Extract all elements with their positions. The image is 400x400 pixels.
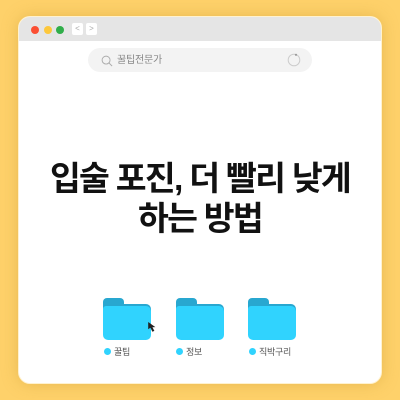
folder body: [176, 306, 224, 340]
icon: reload: [288, 54, 300, 66]
label text: 직박구리: [259, 347, 291, 357]
back button: [72, 23, 83, 35]
label text: 정보: [186, 347, 202, 357]
icon: cursor arrow: [148, 322, 156, 332]
title: 입술 포진, 더 빨리 낮게: [50, 161, 350, 198]
forward button: >: [89, 24, 94, 33]
title bar: [19, 17, 381, 41]
folder body: [103, 306, 151, 340]
folder tab: [176, 298, 197, 310]
red dot: [31, 26, 39, 34]
back button: <: [75, 24, 80, 33]
title: 하는 방법: [138, 201, 262, 238]
folder: 정보: [176, 298, 224, 357]
green dot: [56, 26, 64, 34]
folder back: [103, 304, 151, 324]
label dot: [104, 348, 111, 355]
label dot: [176, 348, 183, 355]
icon: search: [102, 56, 112, 66]
folder body: [248, 306, 296, 340]
folder back: [248, 304, 296, 324]
folder: 꿀팁: [103, 298, 151, 357]
search bar: [88, 48, 312, 72]
folder tab: [103, 298, 124, 310]
folder: 직박구리: [248, 298, 296, 357]
title: [50, 161, 350, 238]
search text: 꿀팁전문가: [117, 55, 162, 66]
forward button: [86, 23, 97, 35]
label dot: [249, 348, 256, 355]
folder back: [176, 304, 224, 324]
folder tab: [248, 298, 269, 310]
window controls: [31, 26, 64, 34]
yellow dot: [44, 26, 52, 34]
label text: 꿀팁: [114, 347, 130, 357]
